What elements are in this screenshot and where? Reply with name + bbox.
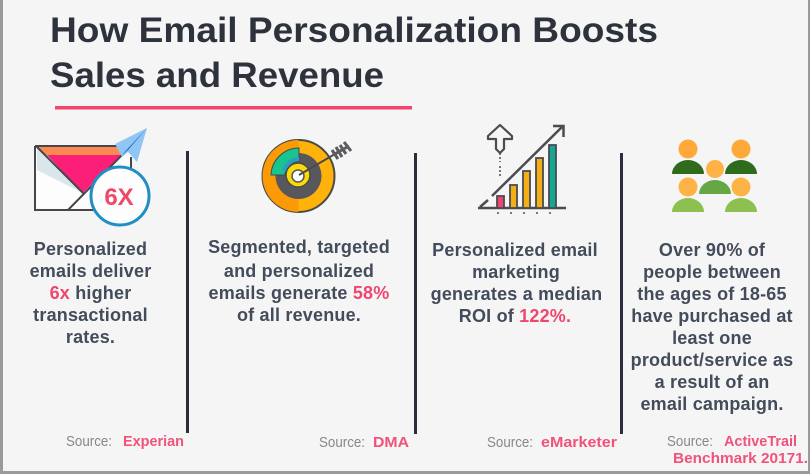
text: Over 90% purchased from email: people between xyxy=(643,262,781,282)
source: Experian: Source: xyxy=(66,433,112,450)
divider 3 xyxy=(620,153,623,434)
text: 58% of all revenue: and personalized xyxy=(224,261,374,281)
text: ROI of 122%: marketing xyxy=(472,262,560,282)
text: Over 90% purchased from email: product/service as xyxy=(631,350,793,370)
icon: envelope with paper plane and 6X badge: 6X xyxy=(104,184,134,211)
source: Experian: Experian xyxy=(123,433,184,450)
text: 6x transactional rates: emails deliver xyxy=(30,261,151,281)
text: 6x transactional rates: rates. xyxy=(66,327,115,347)
text: Over 90% purchased from email: least one xyxy=(672,328,752,348)
source: ActiveTrail: ActiveTrail xyxy=(724,433,797,450)
text: ROI of 122%: ROI of 122%. xyxy=(459,306,571,326)
text: Over 90% purchased from email: have purchased at xyxy=(631,306,793,326)
text: 6x transactional rates: 6x higher xyxy=(50,283,131,303)
source: eMarketer: Source: xyxy=(487,434,533,451)
source: DMA: DMA xyxy=(373,434,409,451)
text: ROI of 122%: Personalized email xyxy=(432,240,598,260)
text: 58% of all revenue: of all revenue. xyxy=(237,305,361,325)
icon: target with arrow xyxy=(262,140,351,212)
text: Over 90% purchased from email: Over 90% of xyxy=(659,240,766,260)
source: eMarketer: eMarketer xyxy=(541,434,617,451)
source: ActiveTrail: Benchmark 20171. xyxy=(673,450,808,467)
text: Over 90% purchased from email: a result of an xyxy=(655,372,769,392)
text: 6x transactional rates: Personalized xyxy=(34,239,147,259)
icon: group of people xyxy=(672,140,757,212)
text: ROI of 122%: generates a median xyxy=(431,284,602,304)
text: Over 90% purchased from email: the ages of 18-65 xyxy=(637,284,787,304)
divider 1 xyxy=(186,151,189,433)
title underline xyxy=(55,106,412,110)
text: 58% of all revenue: Segmented, targeted xyxy=(208,237,390,257)
text: Over 90% purchased from email: email campaign. xyxy=(640,394,784,414)
title: Sales and Revenue xyxy=(50,56,384,95)
title xyxy=(50,11,658,95)
text: 58% of all revenue: emails generate 58% xyxy=(209,283,389,303)
source: ActiveTrail: Source: xyxy=(667,433,713,450)
text: 6x transactional rates: transactional xyxy=(33,305,148,325)
divider 2 xyxy=(414,153,417,434)
icon: rising bar chart with arrow xyxy=(478,125,566,213)
source: DMA: Source: xyxy=(319,434,365,451)
title: How Email Personalization Boosts xyxy=(50,11,658,50)
icon: envelope with paper plane and 6X badge xyxy=(35,128,149,225)
